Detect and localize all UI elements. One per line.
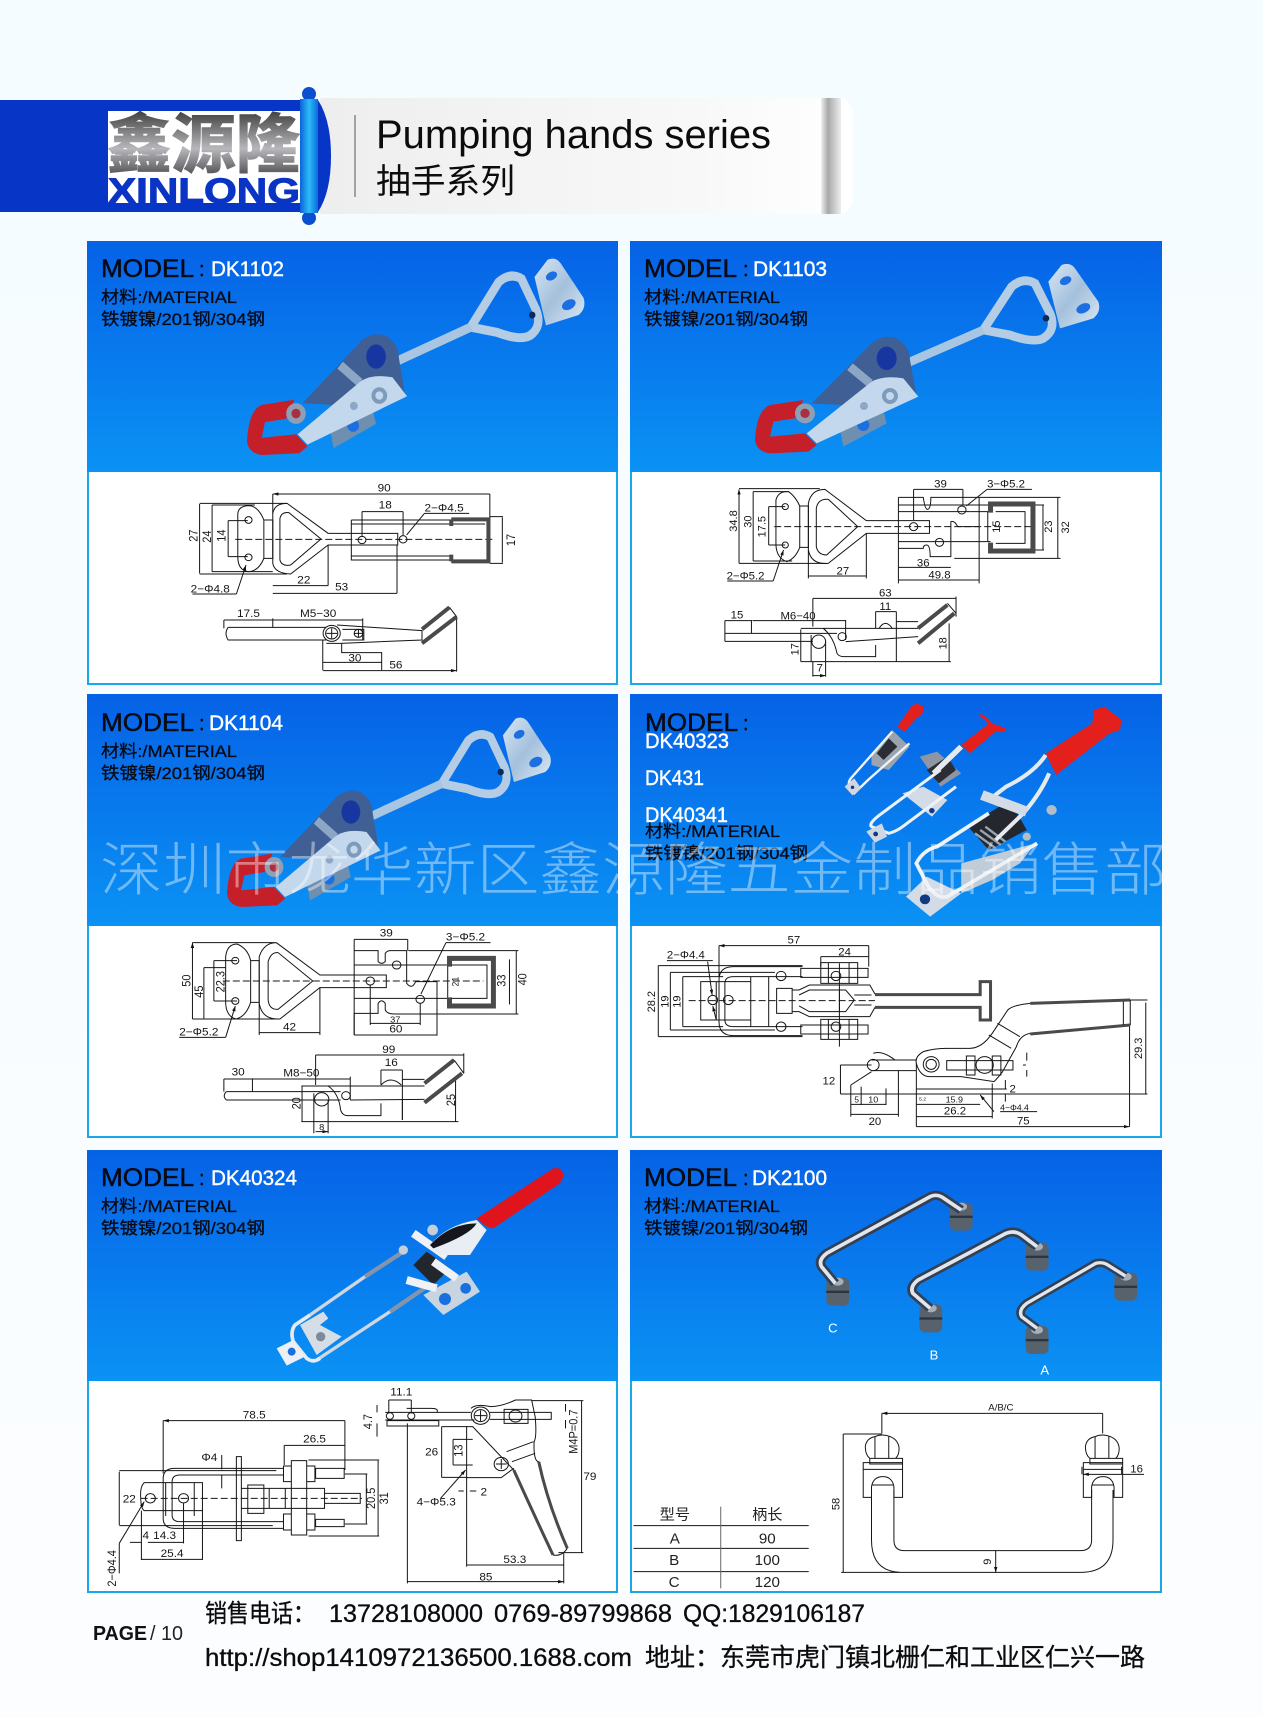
header divider xyxy=(354,115,356,197)
material text: 铁镀镍/201钢/304钢 xyxy=(101,1219,265,1238)
material text: 材料:/MATERIAL xyxy=(101,742,237,761)
handle labels xyxy=(828,1321,1049,1378)
model heading: : xyxy=(199,713,205,735)
drawing: DK40324: 79 xyxy=(583,1471,596,1483)
handle labels: A xyxy=(1040,1363,1049,1378)
photo background xyxy=(630,1150,1162,1381)
photo: latch clamp with red handle xyxy=(277,1168,563,1366)
header banner xyxy=(0,87,853,225)
logo: 鑫源隆 xyxy=(107,109,300,181)
drawing: DK40324: M4P=0.7 xyxy=(568,1410,581,1454)
drawing: DK1103: 49.8 xyxy=(928,569,951,581)
drawing: DK1103: M6−40 xyxy=(780,610,816,622)
size table: 型号 xyxy=(660,1507,690,1523)
drawing: DK1102: 17 xyxy=(506,534,518,546)
drawing: DK1104: 60 xyxy=(389,1024,402,1036)
drawing: DK40324: 31 xyxy=(379,1492,391,1504)
model heading: : xyxy=(743,1168,749,1190)
band end shading xyxy=(821,98,841,214)
size table xyxy=(633,1507,809,1591)
handle drawing xyxy=(830,1402,1144,1572)
drawing: DK1103: 17 xyxy=(789,643,801,655)
drawing: DK40324: 22 xyxy=(123,1494,136,1506)
model heading: DK1104 xyxy=(209,712,283,735)
handle C xyxy=(820,1195,973,1306)
model heading: DK40324 xyxy=(211,1167,297,1190)
model numbers: DK431 xyxy=(645,767,704,790)
drawing: DK40324: 85 xyxy=(479,1572,492,1583)
panel: DK1104 xyxy=(87,694,618,1137)
drawing: DK40323: 5 xyxy=(854,1095,859,1104)
drawing: DK40324: 4−Φ5.3 xyxy=(417,1497,456,1508)
model heading xyxy=(101,255,284,283)
grey title band xyxy=(320,98,853,214)
drawing: DK1103: 11 xyxy=(879,601,891,613)
model heading: MODEL xyxy=(644,1164,737,1192)
drawing: DK40324: 20.5 xyxy=(366,1488,378,1509)
handle A xyxy=(1021,1263,1137,1354)
drawing: DK40323: 4−Φ4.4 xyxy=(1000,1102,1029,1112)
drawing: DK1104: 37 xyxy=(390,1015,400,1024)
drawing: DK1103: 7 xyxy=(817,663,823,675)
drawing: DK1103: 23 xyxy=(1043,521,1055,533)
drawing: DK1102: 27 xyxy=(188,530,201,542)
drawing: DK40323: 5.2 xyxy=(919,1097,926,1103)
panel: DK40323 DK431 DK40341 xyxy=(630,694,1162,1137)
drawing: DK1104: M8−50 xyxy=(283,1068,319,1079)
handle drawing: A/B/C xyxy=(988,1402,1014,1413)
page number: PAGE xyxy=(93,1623,147,1645)
model heading: DK2100 xyxy=(752,1167,827,1190)
material text xyxy=(101,742,265,783)
drawing: DK1102: 14 xyxy=(216,530,228,542)
panel frame xyxy=(631,242,1161,684)
small latch xyxy=(845,704,924,795)
panel frame xyxy=(631,1151,1161,1592)
drawing: DK1104: 40 xyxy=(517,973,529,985)
drawing: DK40323: 2−Φ4.4 xyxy=(667,949,705,961)
drawing: DK1104: 8 xyxy=(319,1122,324,1132)
drawing: DK1104: 25 xyxy=(446,1094,458,1106)
model heading: : xyxy=(199,259,205,281)
drawing: DK1104: 50 xyxy=(181,975,193,987)
drawing: DK1102: 30 xyxy=(348,653,361,665)
drawing: DK1104: 21 xyxy=(450,977,460,986)
panel frame xyxy=(88,695,617,1137)
panel: DK1102 xyxy=(87,241,618,684)
photo background xyxy=(630,694,1162,926)
drawing: DK1104: 45 xyxy=(194,986,206,998)
drawing: DK1103: 3−Φ5.2 xyxy=(987,478,1025,490)
drawing: DK40324: 11.1 xyxy=(390,1387,412,1399)
material text: 材料:/MATERIAL xyxy=(645,822,780,841)
model heading: MODEL xyxy=(101,255,194,283)
model numbers: DK40323 xyxy=(645,730,729,753)
drawing: DK1103: 36 xyxy=(917,558,930,570)
model heading xyxy=(644,1164,827,1192)
model heading: : xyxy=(743,259,749,281)
drawing: DK1102: 18 xyxy=(379,500,392,511)
drawing: DK40324: 78.5 xyxy=(243,1410,266,1421)
sales phone line: 销售电话： xyxy=(205,1600,315,1628)
drawing: DK40323: 57 xyxy=(788,934,800,946)
model heading xyxy=(101,709,283,737)
drawing: DK1103: 63 xyxy=(879,587,892,599)
model heading xyxy=(644,255,827,283)
drawing: DK1104: 30 xyxy=(232,1067,245,1078)
drawing: DK1102: M5−30 xyxy=(300,608,336,620)
drawing: DK1103: 15 xyxy=(991,521,1003,533)
model heading: MODEL xyxy=(101,709,194,737)
drawing: DK1103: 34.8 xyxy=(728,510,740,532)
model heading: MODEL xyxy=(644,255,737,283)
size table: C xyxy=(669,1574,680,1591)
sales phone line: QQ:1829106187 xyxy=(683,1600,865,1628)
drawing: DK40324: 4.7 xyxy=(363,1414,375,1429)
size table: B xyxy=(669,1552,679,1569)
material text: 铁镀镍/201钢/304钢 xyxy=(101,764,265,783)
handle drawing: 16 xyxy=(1130,1463,1143,1475)
material text: 材料:/MATERIAL xyxy=(101,1197,237,1216)
drawing: DK40323: 29.3 xyxy=(1133,1038,1145,1059)
drawing: DK1104: 99 xyxy=(382,1044,395,1056)
photo: latch clamp xyxy=(247,259,584,455)
drawing: DK1103: 2−Φ5.2 xyxy=(727,570,764,582)
material text xyxy=(101,1197,265,1238)
sales phone line xyxy=(205,1600,865,1628)
material text xyxy=(644,1197,808,1238)
drawing: DK1102: 56 xyxy=(389,660,402,671)
sales phone line: 13728108000 xyxy=(329,1600,483,1628)
watermark: 深圳市龙华新区鑫源隆五金制品销售部 xyxy=(100,823,1167,907)
logo: XINLONG xyxy=(108,172,300,211)
photo background xyxy=(87,694,618,926)
material text xyxy=(644,288,808,329)
model heading: MODEL xyxy=(101,1164,194,1192)
material text: 铁镀镍/201钢/304钢 xyxy=(645,844,808,863)
model heading: : xyxy=(199,1168,205,1190)
model heading: DK1103 xyxy=(753,258,827,281)
drawing: DK1103 xyxy=(725,478,1072,677)
drawing: DK40323: 10 xyxy=(868,1094,878,1104)
drawing: DK40323 xyxy=(646,934,1148,1128)
drawing: DK1104: 22.3 xyxy=(215,971,228,992)
photo background xyxy=(87,241,618,472)
size table: 120 xyxy=(755,1574,780,1591)
blue band xyxy=(0,100,331,212)
handle labels: C xyxy=(828,1321,838,1336)
drawing: DK40324: Φ4 xyxy=(201,1452,217,1464)
website and address line: 地址：东莞市虎门镇北栅仁和工业区仁兴一路 xyxy=(645,1644,1145,1672)
page number: / 10 xyxy=(150,1623,183,1645)
drawing: DK40323: 12 xyxy=(823,1076,835,1088)
medium latch xyxy=(866,714,1006,843)
panel frame xyxy=(88,242,617,684)
photo background xyxy=(87,1150,618,1381)
drawing: DK1104: 3−Φ5.2 xyxy=(446,932,485,944)
model heading: MODEL xyxy=(645,709,738,737)
panel: DK2100 xyxy=(630,1150,1162,1592)
panel: DK1103 xyxy=(630,241,1162,684)
panel: DK40324 xyxy=(87,1150,618,1592)
photo: latch clamp xyxy=(227,718,551,907)
drawing: DK40324: 13 xyxy=(453,1445,466,1457)
model heading: : xyxy=(743,713,749,735)
material text: 铁镀镍/201钢/304钢 xyxy=(644,310,808,329)
sales phone line: 0769-89799868 xyxy=(494,1600,672,1628)
drawing: DK1102: 17.5 xyxy=(237,608,260,620)
drawing: DK1104: 2−Φ5.2 xyxy=(179,1027,218,1039)
size table: 柄长 xyxy=(752,1507,783,1523)
drawing: DK1103: 27 xyxy=(837,566,849,578)
drawing: DK40323: 24 xyxy=(838,946,851,958)
drawing: DK1102: 22 xyxy=(297,575,310,587)
drawing: DK40324: 25.4 xyxy=(161,1548,184,1560)
drawing: DK40323: 2 xyxy=(1009,1083,1016,1095)
drawing: DK40324: 14.3 xyxy=(153,1530,176,1542)
model numbers xyxy=(645,730,729,827)
drawing: DK40324: 2−Φ4.4 xyxy=(107,1550,119,1587)
drawing: DK1103: 17.5 xyxy=(756,516,769,537)
photo background xyxy=(630,241,1162,472)
drawing: DK1103: 18 xyxy=(938,637,950,649)
drawing: DK40324: 53.3 xyxy=(503,1554,526,1566)
title english: Pumping hands series xyxy=(376,113,771,157)
drawing: DK40324 xyxy=(107,1387,596,1587)
material text: 材料:/MATERIAL xyxy=(644,288,780,307)
handle labels: B xyxy=(930,1348,938,1362)
model numbers: DK40341 xyxy=(645,804,728,827)
drawing: DK1104: 42 xyxy=(283,1022,296,1033)
drawing: DK1103: 39 xyxy=(934,478,947,490)
footer xyxy=(93,1600,1145,1672)
drawing: DK40323: 19 xyxy=(672,996,684,1008)
handle B xyxy=(912,1232,1048,1332)
drawing: DK1103: 30 xyxy=(742,516,754,528)
drawing: DK1102: 90 xyxy=(378,483,391,495)
title chinese: 抽手系列 xyxy=(376,163,515,201)
drawing: DK1104: 39 xyxy=(380,928,393,940)
size table: 100 xyxy=(755,1552,780,1569)
photo: three latches xyxy=(845,704,1122,917)
photo: three handles xyxy=(820,1195,1137,1378)
model heading: DK1102 xyxy=(211,258,284,281)
drawing: DK40324: 26.5 xyxy=(303,1434,326,1446)
drawing: DK1104: 20 xyxy=(291,1097,303,1109)
material text: 铁镀镍/201钢/304钢 xyxy=(644,1219,808,1238)
material text xyxy=(645,822,808,863)
drawing: DK40323: 28.2 xyxy=(646,991,658,1012)
drawing: DK40323: 20 xyxy=(869,1116,881,1128)
drawing: DK1102: 24 xyxy=(202,531,214,543)
drawing: DK40323: 15.9 xyxy=(946,1095,963,1105)
panel frame xyxy=(88,1151,617,1592)
drawing: DK1102: 53 xyxy=(335,582,348,594)
drawing: DK1102 xyxy=(188,483,518,672)
drawing: DK1102: 2−Φ4.5 xyxy=(425,503,464,514)
drawing: DK1104: 33 xyxy=(496,975,509,987)
model heading xyxy=(101,1164,297,1192)
website and address line xyxy=(205,1644,1145,1672)
drawing: DK40323: 75 xyxy=(1017,1116,1030,1128)
drawing: DK1104: 16 xyxy=(385,1057,398,1069)
drawing: DK1103: 32 xyxy=(1060,521,1072,533)
drawing: DK1103: 15 xyxy=(731,609,743,621)
logo rod xyxy=(300,87,318,225)
drawing: DK40324: 26 xyxy=(425,1447,438,1459)
material text: 材料:/MATERIAL xyxy=(101,288,237,307)
handle drawing: 58 xyxy=(830,1498,842,1510)
drawing: DK1102: 2−Φ4.8 xyxy=(191,584,230,595)
handle drawing: 9 xyxy=(982,1559,994,1565)
panel frame xyxy=(631,695,1161,1137)
drawing: DK1104 xyxy=(179,928,529,1133)
size table: A xyxy=(670,1531,680,1547)
page number xyxy=(93,1623,183,1645)
drawing: DK40324: 2 xyxy=(481,1487,487,1498)
drawing: DK40324: 4 xyxy=(142,1530,149,1542)
drawing: DK40323: 19 xyxy=(659,996,672,1008)
drawing: DK40323: 26.2 xyxy=(944,1106,966,1118)
large latch xyxy=(906,707,1122,917)
size table: 90 xyxy=(759,1531,776,1547)
photo: latch clamp xyxy=(755,264,1099,453)
material text: 铁镀镍/201钢/304钢 xyxy=(101,310,265,329)
material text: 材料:/MATERIAL xyxy=(644,1197,780,1216)
website and address line: http://shop1410972136500.1688.com xyxy=(205,1644,632,1672)
drawing and table: DK2100 xyxy=(633,1402,1144,1591)
drawing: DK40323: 8 xyxy=(1022,1063,1028,1066)
material text xyxy=(101,288,265,329)
